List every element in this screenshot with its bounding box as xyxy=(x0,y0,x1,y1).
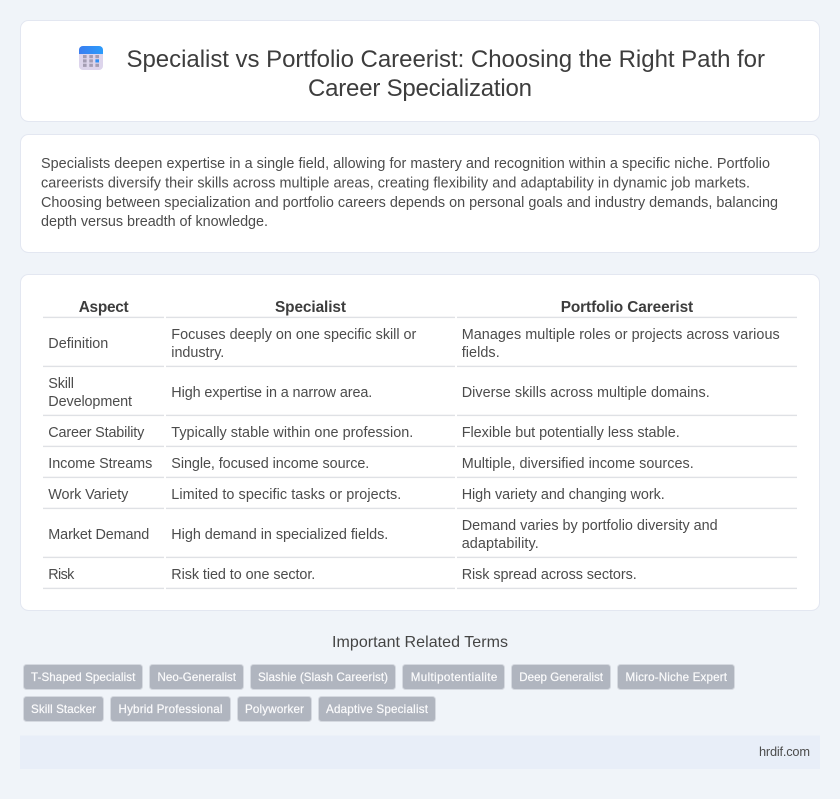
row: market demand xyxy=(48,518,718,552)
tag: T-Shaped Specialist: T-Shaped Specialist xyxy=(31,671,136,684)
text block: introduction xyxy=(41,156,778,230)
table header: Aspect xyxy=(79,299,129,316)
tag: Adaptive Specialist: Adaptive Specialist xyxy=(326,703,429,716)
table header: Specialist xyxy=(275,299,346,316)
tag: Polyworker xyxy=(238,696,312,722)
tag: Deep Generalist xyxy=(512,664,610,690)
row: market demand: High demand in specialized fields. xyxy=(171,527,388,543)
panel: related term tags xyxy=(24,664,734,722)
row: career stability: Career Stability xyxy=(48,425,145,441)
tag: Multipotentialite: Multipotentialite xyxy=(411,671,497,684)
table header xyxy=(79,299,693,316)
tag: Slashie xyxy=(250,664,396,690)
panel: header xyxy=(20,20,820,122)
row: skill development: Development xyxy=(48,394,132,410)
tag: T-Shaped Specialist xyxy=(24,664,142,690)
row: market demand: Demand varies by portfolio diversity and xyxy=(462,518,718,534)
row: risk: Risk spread across sectors. xyxy=(462,567,637,583)
tag: Deep Generalist: Deep Generalist xyxy=(519,671,604,684)
row: skill development: Diverse skills across multiple domains. xyxy=(462,385,710,401)
row: career stability: Flexible but potentially less stable. xyxy=(462,425,680,441)
row: definition xyxy=(48,327,780,361)
row: career stability: Typically stable within one profession. xyxy=(171,425,413,441)
title xyxy=(126,46,765,102)
row: skill development xyxy=(48,376,710,410)
icon: calendar xyxy=(79,46,103,70)
tag: Micro-Niche Expert: Micro-Niche Expert xyxy=(626,671,728,684)
row: definition: Definition xyxy=(48,336,108,352)
tag: Neo-Generalist: Neo-Generalist xyxy=(158,671,237,684)
footer xyxy=(20,736,820,769)
row: skill development: Skill xyxy=(48,376,74,392)
tag: Skill Stacker: Skill Stacker xyxy=(31,703,96,716)
row: risk xyxy=(48,567,637,583)
tag: Adaptive Specialist xyxy=(318,696,436,722)
text block: introduction: careerists diversify their skills across multiple areas, creating flexibility and adaptability in dynamic job markets. xyxy=(41,176,750,192)
row: income streams xyxy=(48,456,694,472)
row: definition: Focuses deeply on one specific skill or xyxy=(171,327,417,343)
row: market demand: Market Demand xyxy=(48,527,149,543)
tag: Hybrid Professional xyxy=(110,696,230,722)
row: definition: industry. xyxy=(171,345,224,361)
tag: Polyworker: Polyworker xyxy=(245,703,304,716)
row: income streams: Income Streams xyxy=(48,456,152,472)
row: market demand: adaptability. xyxy=(462,536,539,552)
title: Specialist vs Portfolio Careerist: Choosing the Right Path for xyxy=(126,46,765,73)
tag: Neo-Generalist xyxy=(150,664,244,690)
panel: comparison table xyxy=(20,274,820,610)
row: career stability xyxy=(48,425,680,441)
table header: Portfolio Careerist xyxy=(561,299,693,316)
row: income streams: Multiple, diversified income sources. xyxy=(462,456,694,472)
text block: introduction: Choosing between specialization and portfolio careers depends on personal goals and industry demands, balancing xyxy=(41,195,778,211)
row: work variety: Limited to specific tasks or projects. xyxy=(171,487,401,503)
tag: Skill Stacker xyxy=(24,696,104,722)
heading: important related terms: Important Related Terms xyxy=(332,634,508,651)
tag: Multipotentialite xyxy=(402,664,504,690)
row: income streams: Single, focused income source. xyxy=(171,456,369,472)
row: work variety: High variety and changing work. xyxy=(462,487,665,503)
row: risk: Risk xyxy=(48,567,75,583)
tag: Slashie: Slashie (Slash Careerist) xyxy=(258,671,388,684)
row: skill development: High expertise in a narrow area. xyxy=(171,385,372,401)
row: definition: Manages multiple roles or projects across various xyxy=(462,327,780,343)
panel: introduction xyxy=(20,134,820,252)
footer: hrdif.com xyxy=(759,744,810,759)
text block: introduction: depth versus breadth of knowledge. xyxy=(41,214,268,230)
title: Career Specialization xyxy=(308,75,532,102)
row: work variety xyxy=(48,487,665,503)
row: definition: fields. xyxy=(462,345,500,361)
row: work variety: Work Variety xyxy=(48,487,129,503)
text block: introduction: Specialists deepen expertise in a single field, allowing for mastery and recognition within a specific niche. Portfolio xyxy=(41,156,770,172)
tag: Micro-Niche Expert xyxy=(618,664,734,690)
row: risk: Risk tied to one sector. xyxy=(171,567,315,583)
tag: Hybrid Professional: Hybrid Professional xyxy=(118,703,222,716)
